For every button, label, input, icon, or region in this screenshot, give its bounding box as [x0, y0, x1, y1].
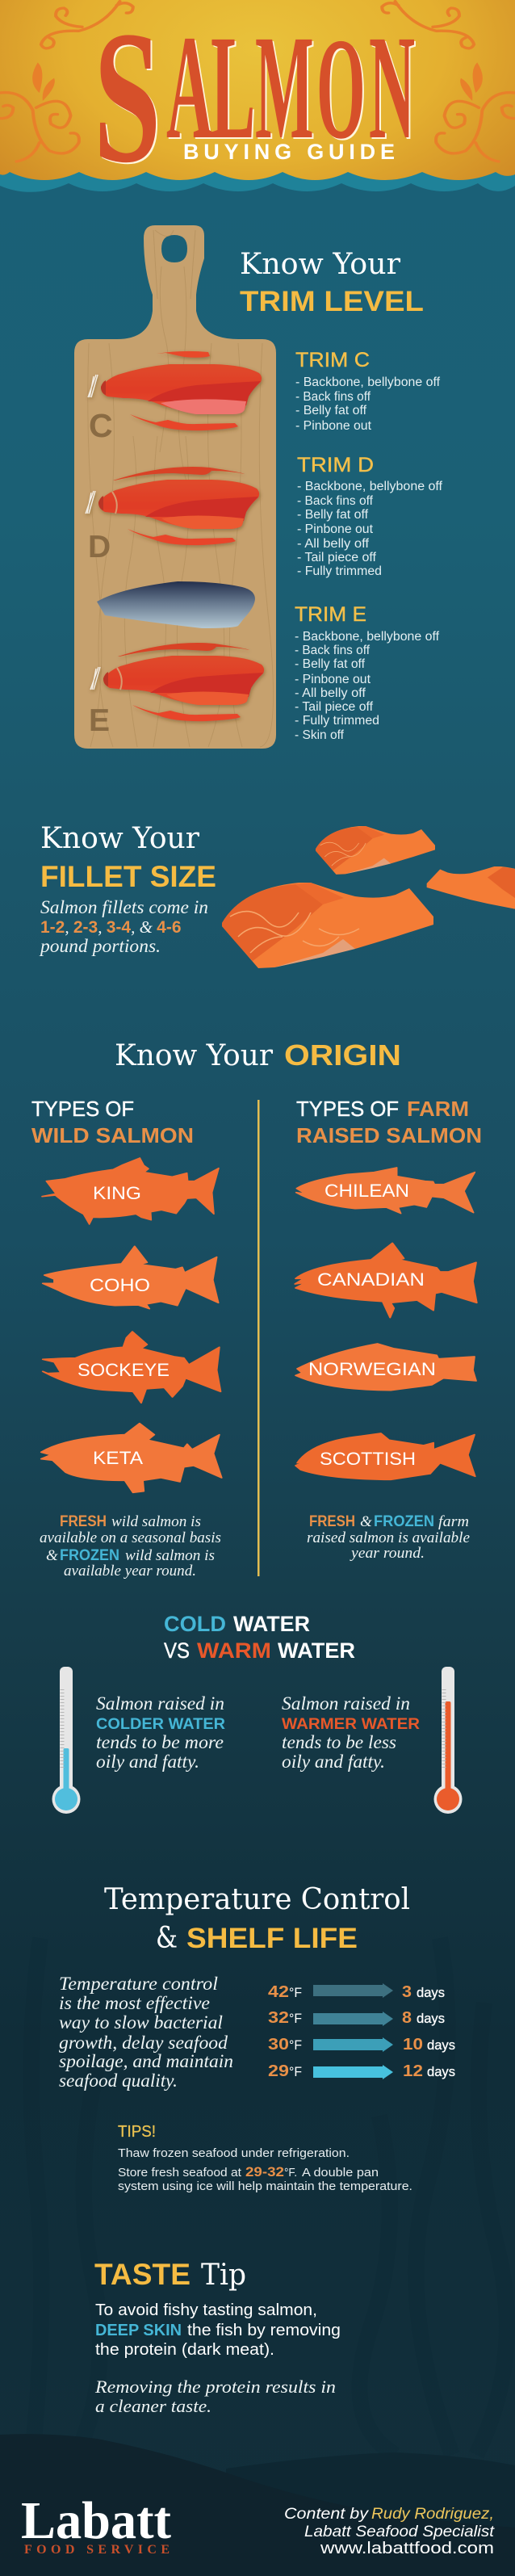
title: Salmon: N [371, 6, 417, 171]
title: Salmon: O [318, 10, 367, 171]
text: deep skin tip: DEEP SKIN [95, 2322, 182, 2339]
header yellow background [0, 0, 515, 180]
text: deep skin tip: the fish by removing [187, 2322, 341, 2339]
chart row: 42F 3 days [268, 1983, 445, 2001]
panel: fillet size [39, 822, 515, 968]
title: Salmon: A [166, 4, 213, 170]
logo: Labatt Food Service: Labatt [21, 2491, 171, 2550]
heading: temperature control: & [156, 1922, 178, 1955]
text: fillet portions: Salmon fillets come in [40, 897, 208, 917]
chart row: 30F 10 days: °F [289, 2037, 302, 2053]
text: wild availability [40, 1513, 221, 1580]
panel: temperature control and shelf life [59, 1883, 455, 2193]
text: warmer water [282, 1693, 420, 1772]
title: Salmon: L [211, 5, 255, 170]
text: colder water: tends to be more [96, 1732, 224, 1752]
heading: temperature control: Temperature Control [104, 1883, 410, 1916]
text: farm availability: FRESH [309, 1513, 355, 1530]
text: wild availability: wild salmon is [111, 1513, 201, 1530]
text: farm availability: FROZEN [374, 1513, 434, 1530]
heading: farm raised salmon [296, 1097, 482, 1147]
trim E block [295, 603, 440, 742]
text: colder water: COLDER WATER [96, 1716, 225, 1733]
text: temperature control explanation [59, 1974, 233, 2091]
chart row: 30F 10 days: 10 [403, 2036, 423, 2054]
header panel [0, 0, 515, 203]
heading: know your: Know Your [40, 822, 200, 855]
chart row: 42F 3 days: 3 [402, 1983, 412, 2001]
text: fillet portions: pound portions. [39, 936, 161, 956]
panel: trim level [74, 225, 443, 749]
heading: cold vs warm water: WATER [233, 1612, 310, 1636]
tips: Store fresh seafood at [118, 2166, 242, 2180]
fish: canadian [295, 1243, 477, 1318]
title: Salmon: O [316, 8, 366, 170]
fish: king: KING [93, 1183, 141, 1203]
heading: cold vs warm water: WATER [278, 1638, 355, 1663]
fish: scottish [295, 1433, 475, 1479]
text: deep skin tip: Removing the protein results in [94, 2377, 336, 2397]
fish: chilean [296, 1168, 475, 1214]
trim E block: - Skin off [295, 728, 345, 742]
heading: farm raised salmon: TYPES OF [296, 1097, 399, 1121]
credit text [284, 2506, 495, 2557]
heading: temperature control: SHELF LIFE [186, 1923, 358, 1954]
panel: origin [31, 1038, 482, 1580]
icon: cold thermometer [52, 1667, 81, 1814]
trim E block: - Backbone, bellybone off [295, 630, 440, 644]
fish: scottish: SCOTTISH [320, 1449, 416, 1469]
text: deep skin tip: a cleaner taste. [95, 2396, 211, 2416]
chart row: 32F 8 days: °F [289, 2011, 302, 2026]
text: farm availability: year round. [350, 1545, 425, 1562]
panel: cold vs warm water [52, 1612, 462, 1814]
heading: cold vs warm water: COLD [164, 1612, 226, 1636]
ornament: right flourishes [382, 2, 515, 162]
text: temperature control explanation: growth, delay seafood [59, 2033, 228, 2053]
footer hill front [0, 2434, 515, 2576]
chart row: 32F 8 days: days [417, 2011, 445, 2026]
chart row: 29F 12 days: 12 [403, 2062, 423, 2080]
credit text: Rudy Rodriguez, [371, 2506, 494, 2523]
heading: trim level: TRIM LEVEL [240, 286, 424, 317]
text: wild availability: FRESH [60, 1513, 107, 1530]
heading: farm raised salmon: RAISED SALMON [296, 1123, 482, 1147]
fillet: small [427, 866, 515, 909]
title: Salmon: M [255, 4, 314, 170]
heading: know your origin: Know Your [115, 1039, 274, 1072]
fish: king [42, 1158, 219, 1224]
chart row: 32F 8 days: 32 [268, 2009, 289, 2027]
trim E block: - All belly off [295, 686, 366, 700]
cutting board [74, 225, 276, 749]
trim E block: - Pinbone out [295, 673, 371, 686]
heading: cold vs warm water: VS [164, 1638, 190, 1663]
fish: chilean: CHILEAN [324, 1181, 409, 1201]
fillet: large [222, 883, 433, 968]
trim D block: - Tail piece off [297, 551, 377, 564]
chart row: 32F 8 days: 8 [402, 2009, 412, 2027]
chart row: 29F 12 days [268, 2062, 455, 2080]
chart row: 30F 10 days [268, 2036, 455, 2054]
fish: canadian: CANADIAN [317, 1269, 425, 1290]
title: Salmon: M [257, 6, 316, 171]
subtitle: buying guide: BUYING GUIDE [183, 140, 395, 164]
text: wild availability: available on a seasonal basis [40, 1529, 221, 1546]
tips: system using ice will help maintain the temperature. [118, 2180, 412, 2193]
fish: sockeye: SOCKEYE [77, 1360, 170, 1380]
fillet: medium [316, 826, 435, 875]
text: warmer water: oily and fatty. [282, 1752, 385, 1772]
heading: wild salmon: TYPES OF [31, 1097, 134, 1121]
trim E block: - Belly fat off [295, 657, 366, 671]
decorative kelp background [31, 1938, 507, 2455]
ornament: left flourishes [0, 2, 133, 162]
tips: °F. [284, 2166, 297, 2180]
title: Salmon: L [212, 6, 257, 172]
heading: know your origin [115, 1038, 401, 1072]
trim C block: - Belly fat off [295, 404, 367, 417]
trim D block: - Fully trimmed [297, 564, 382, 578]
letter C: C [89, 407, 113, 444]
text: deep skin tip [94, 2301, 341, 2416]
trim D block: TRIM D [297, 454, 374, 476]
letter D: D [88, 530, 111, 564]
footer hill back [226, 2452, 515, 2576]
text: colder water: oily and fatty. [96, 1752, 199, 1772]
text: warmer water: tends to be less [282, 1732, 396, 1752]
title: Salmon: N [369, 4, 415, 170]
chart row: 42F 3 days: 42 [268, 1983, 289, 2001]
chart row: 42F 3 days: °F [289, 1985, 302, 2000]
text: warmer water: WARMER WATER [282, 1716, 420, 1733]
text: deep skin tip: To avoid fishy tasting salmon, [95, 2301, 317, 2319]
heading: taste tip: TASTE [94, 2258, 191, 2291]
fillet: trim C [88, 351, 262, 430]
trim D block: - Pinbone out [297, 522, 374, 536]
text: wild availability: available year round. [64, 1563, 196, 1580]
trim D block: - Backbone, bellybone off [297, 480, 443, 493]
tips [118, 2123, 412, 2193]
text: farm availability: raised salmon is available [307, 1529, 470, 1546]
heading: wild salmon [31, 1097, 194, 1147]
trim C block [295, 349, 441, 433]
fish: coho [43, 1246, 219, 1309]
fish: coho: COHO [90, 1275, 150, 1295]
text: temperature control explanation: Temperature control [59, 1974, 218, 1994]
heading: know your: Know Your [240, 248, 401, 281]
trim E block: - Tail piece off [295, 700, 374, 714]
chart row: 29F 12 days: days [427, 2064, 455, 2079]
wave band [0, 162, 515, 192]
pinbones C [88, 375, 98, 397]
panel: taste tip [94, 2258, 341, 2416]
tips: Thaw frozen seafood under refrigeration. [118, 2146, 350, 2160]
heading: temperature control [104, 1883, 410, 1955]
chart row: 30F 10 days: 30 [268, 2036, 289, 2054]
title: Salmon: A [168, 6, 215, 171]
text: fillet portions [39, 897, 208, 956]
fish: keta [41, 1424, 222, 1492]
text: colder water: Salmon raised in [96, 1693, 224, 1714]
fillet: skin on [97, 581, 255, 628]
trim E block: TRIM E [295, 603, 366, 626]
text: farm availability: & [360, 1513, 372, 1530]
text: warmer water: Salmon raised in [282, 1693, 410, 1714]
heading: know your origin: ORIGIN [284, 1038, 401, 1072]
trim E block: - Back fins off [295, 644, 371, 657]
icon: warm thermometer [434, 1667, 462, 1814]
heading: fillet size: FILLET SIZE [40, 860, 216, 893]
trim C block: - Pinbone out [295, 419, 372, 433]
logo: Labatt Food Service: FOOD SERVICE [24, 2543, 170, 2557]
pinbones E [90, 667, 100, 690]
text: farm availability [307, 1513, 470, 1562]
text: wild availability: wild salmon is [125, 1547, 215, 1564]
letter E: E [89, 703, 110, 738]
chart row: 29F 12 days: °F [289, 2064, 302, 2079]
trim C block: TRIM C [295, 349, 370, 371]
text: temperature control explanation: is the most effective [59, 1993, 210, 2013]
chart row: 32F 8 days [268, 2009, 445, 2027]
tips: 29-32 [245, 2164, 284, 2180]
chart row: 30F 10 days: days [427, 2037, 455, 2053]
fish: sockeye [43, 1332, 220, 1403]
fish: norwegian: NORWEGIAN [308, 1359, 436, 1379]
text: deep skin tip: the protein (dark meat). [95, 2341, 274, 2359]
title: Salmon [94, 0, 417, 203]
credit text: Labatt Seafood Specialist [304, 2524, 495, 2540]
trim D block: - All belly off [297, 537, 370, 551]
text: wild availability: & [46, 1547, 58, 1564]
panel: footer [0, 2434, 515, 2576]
text: temperature control explanation: seafood quality. [59, 2070, 178, 2091]
heading: taste tip [94, 2258, 246, 2292]
tips: A double pan [302, 2166, 379, 2180]
text: farm availability: farm [438, 1513, 469, 1530]
heading: cold vs warm water [164, 1612, 355, 1663]
text: colder water [96, 1693, 225, 1772]
text: temperature control explanation: way to slow bacterial [59, 2012, 223, 2033]
text: fillet portions: 1-2, 2-3, 3-4, & 4-6 [40, 917, 182, 937]
trim D block: - Back fins off [297, 494, 374, 508]
column divider [258, 1100, 260, 1576]
trim D block: - Belly fat off [297, 508, 369, 522]
tips: TIPS! [118, 2123, 156, 2141]
text: wild availability: FROZEN [60, 1547, 119, 1564]
chart row: 29F 12 days: 29 [268, 2062, 289, 2080]
heading: wild salmon: WILD SALMON [31, 1123, 194, 1147]
fish: norwegian [295, 1344, 476, 1391]
text: temperature control explanation: spoilage, and maintain [59, 2051, 233, 2071]
heading: cold vs warm water: WARM [197, 1638, 271, 1663]
trim C block: - Back fins off [295, 390, 371, 404]
credit text: Content by [284, 2506, 370, 2523]
fillet: trim D [86, 467, 259, 545]
pinbones D [86, 491, 95, 514]
fish: keta: KETA [93, 1448, 143, 1468]
credit text: www.labattfood.com [320, 2540, 494, 2557]
heading: farm raised salmon: FARM [407, 1097, 469, 1121]
fillet: trim E [90, 643, 264, 721]
trim C block: - Backbone, bellybone off [295, 375, 441, 389]
trim E block: - Fully trimmed [295, 714, 379, 728]
heading: taste tip: Tip [201, 2259, 246, 2292]
chart row: 42F 3 days: days [417, 1985, 445, 2000]
trim D block [297, 454, 443, 578]
